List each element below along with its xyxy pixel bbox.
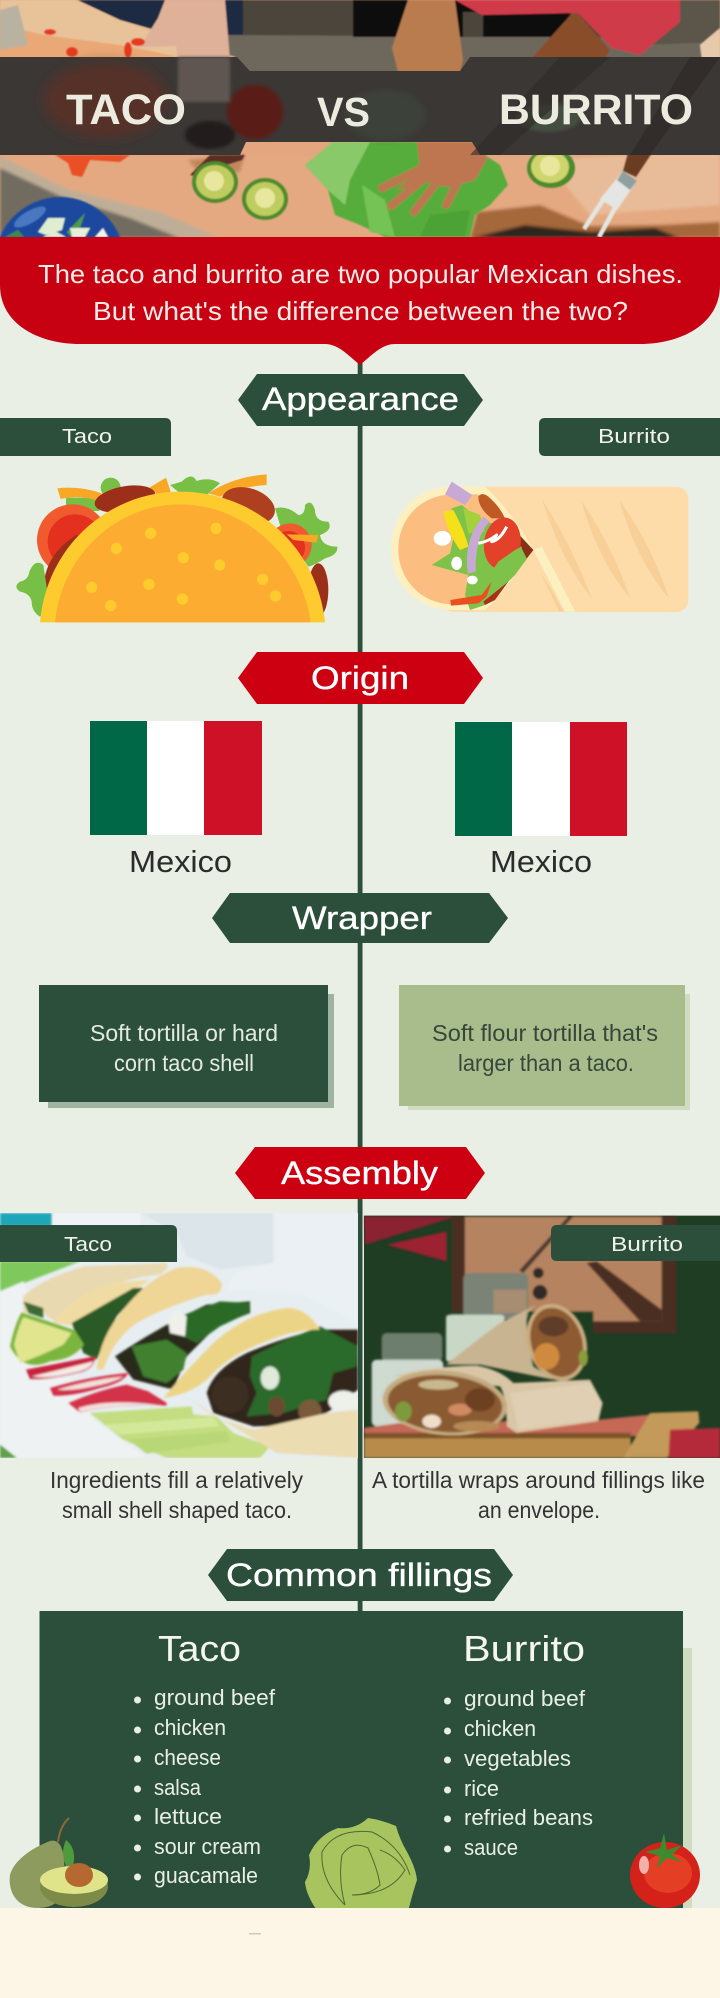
list: taco fillings xyxy=(134,1685,276,1888)
icon: tomato xyxy=(630,1833,700,1908)
list: taco fillings: chicken xyxy=(154,1715,226,1740)
panel: taco wrapper: Soft tortilla or hard xyxy=(90,1020,278,1046)
caption: taco assembly: small shell shaped taco. xyxy=(62,1497,292,1523)
title: BURRITO: BURRITO xyxy=(499,86,693,134)
heading: Appearance xyxy=(238,374,483,426)
panel: common fillings xyxy=(40,1611,692,1908)
panel: burrito wrapper: larger than a taco. xyxy=(458,1050,634,1076)
tab: Burrito on photo: Burrito xyxy=(611,1234,683,1256)
icon: lettuce and hand xyxy=(305,142,508,237)
icon: avocado xyxy=(10,1818,108,1908)
panel: taco wrapper xyxy=(39,985,334,1108)
list: burrito fillings xyxy=(444,1686,593,1860)
column title: Burrito: Burrito xyxy=(463,1628,585,1669)
heading: Wrapper: Wrapper xyxy=(292,900,432,936)
panel: burrito wrapper xyxy=(399,985,690,1110)
heading: Assembly xyxy=(235,1147,485,1199)
flag: Mexico right xyxy=(455,722,627,836)
header photo: chopping board xyxy=(0,0,720,237)
label: Mexico left: Mexico xyxy=(129,844,232,879)
tab: Burrito on photo xyxy=(551,1225,720,1261)
tab: Taco xyxy=(0,418,171,456)
panel: taco wrapper: corn taco shell xyxy=(114,1050,254,1076)
caption: burrito assembly: A tortilla wraps around fillings like xyxy=(372,1467,705,1493)
icon: avocado halves xyxy=(192,148,575,220)
icon: lettuce xyxy=(305,1818,417,1912)
central timeline line xyxy=(358,360,362,1612)
tab: Burrito xyxy=(539,418,720,456)
icon: carving fork xyxy=(584,153,652,237)
icon: taco illustration xyxy=(16,474,337,622)
footer strip xyxy=(0,1908,720,1998)
intro banner: But what's the difference between the two? xyxy=(93,296,628,326)
tab: Taco on photo: Taco xyxy=(64,1234,112,1256)
list: taco fillings: cheese xyxy=(154,1745,221,1770)
list: burrito fillings: sauce xyxy=(464,1835,518,1860)
photo: burrito xyxy=(360,1213,720,1458)
title band xyxy=(0,57,720,155)
panel: burrito wrapper: Soft flour tortilla that's xyxy=(432,1020,658,1046)
heading: Origin: Origin xyxy=(311,660,409,696)
list: taco fillings: ground beef xyxy=(154,1685,276,1710)
intro banner: The taco and burrito are two popular Mexican dishes. xyxy=(38,259,683,289)
heading: Origin xyxy=(238,652,483,704)
tab: Taco on photo xyxy=(0,1225,177,1262)
list: burrito fillings: ground beef xyxy=(464,1686,586,1711)
list: burrito fillings: refried beans xyxy=(464,1805,593,1830)
heading: Appearance: Appearance xyxy=(262,381,459,417)
title: VS: VS xyxy=(317,89,370,135)
heading: Common fillings: Common fillings xyxy=(226,1557,492,1593)
heading: Common fillings xyxy=(208,1549,513,1601)
list: taco fillings: salsa xyxy=(154,1775,202,1800)
column title: Taco: Taco xyxy=(158,1628,241,1669)
icon: burrito illustration xyxy=(391,482,688,612)
caption: burrito assembly: an envelope. xyxy=(478,1497,600,1523)
label: Mexico right: Mexico xyxy=(490,844,592,879)
caption: taco assembly xyxy=(50,1467,303,1523)
flag: Mexico left xyxy=(90,721,262,835)
caption: burrito assembly xyxy=(372,1467,705,1523)
list: burrito fillings: vegetables xyxy=(464,1746,571,1771)
heading: Wrapper xyxy=(212,893,508,943)
caption: taco assembly: Ingredients fill a relatively xyxy=(50,1467,303,1493)
list: taco fillings: lettuce xyxy=(154,1804,222,1829)
list: burrito fillings: chicken xyxy=(464,1716,536,1741)
title: TACO: TACO xyxy=(66,86,186,134)
tab: Burrito: Burrito xyxy=(598,426,670,448)
list: burrito fillings: rice xyxy=(464,1776,499,1801)
heading: Assembly: Assembly xyxy=(281,1155,438,1191)
list: taco fillings: sour cream xyxy=(154,1834,261,1859)
list: taco fillings: guacamale xyxy=(154,1863,258,1888)
tab: Taco: Taco xyxy=(62,426,112,448)
intro banner xyxy=(0,237,720,365)
photo: tacos xyxy=(0,1213,358,1458)
